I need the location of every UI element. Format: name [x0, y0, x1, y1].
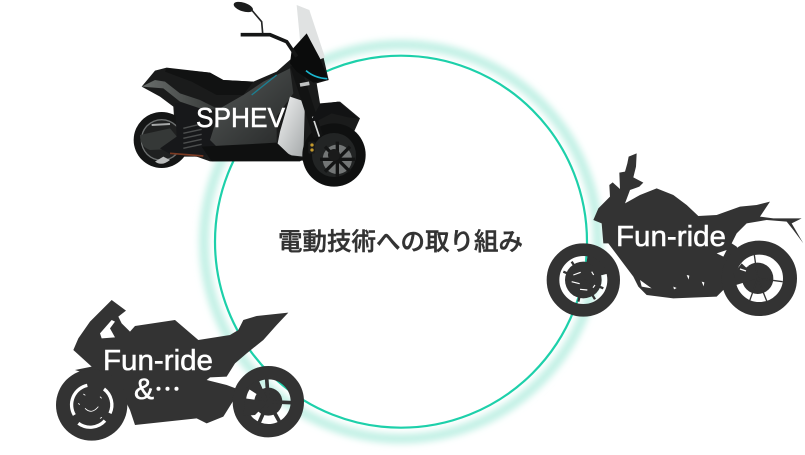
- body: [593, 153, 803, 298]
- motorcycle silhouette: Fun-ride & sport: [56, 300, 297, 441]
- windscreen cut-out: [100, 320, 115, 338]
- front wheel: [56, 369, 127, 441]
- tail and seat: [142, 80, 220, 110]
- front wheel: [553, 250, 614, 310]
- front fender: [311, 102, 358, 122]
- engine cut-outs: [640, 250, 727, 289]
- silver fairing: [277, 97, 305, 157]
- label: Fun-ride &: [103, 345, 213, 407]
- rear wheel: [729, 248, 790, 309]
- base silhouette: [142, 37, 360, 161]
- side panel: [210, 68, 293, 147]
- windscreen: [297, 5, 325, 59]
- motorcycle silhouette: Fun-ride: [553, 153, 803, 310]
- rear wheel: [134, 112, 190, 168]
- rear wheel: [239, 373, 297, 431]
- motorcycle: SPHEV: [134, 0, 366, 187]
- handlebar: [241, 35, 297, 57]
- front wheel: [302, 123, 366, 187]
- label: Fun-ride: Fun-ride: [616, 221, 726, 253]
- ring line: [215, 56, 587, 428]
- label: SPHEV: SPHEV: [196, 102, 285, 133]
- label: Fun-ride &: &…: [134, 368, 181, 407]
- center title: 電動技術への取り組み: [278, 228, 523, 256]
- circle: electrification cycle ring: [204, 45, 598, 439]
- label: Fun-ride &: Fun-ride: [103, 345, 213, 377]
- floor: [202, 143, 304, 161]
- mirror: [232, 0, 263, 33]
- body: [73, 300, 288, 425]
- headlight cowl: [290, 33, 329, 83]
- ring glow: [204, 45, 598, 439]
- engine and swingarm: [160, 100, 215, 157]
- front fork: [295, 65, 318, 137]
